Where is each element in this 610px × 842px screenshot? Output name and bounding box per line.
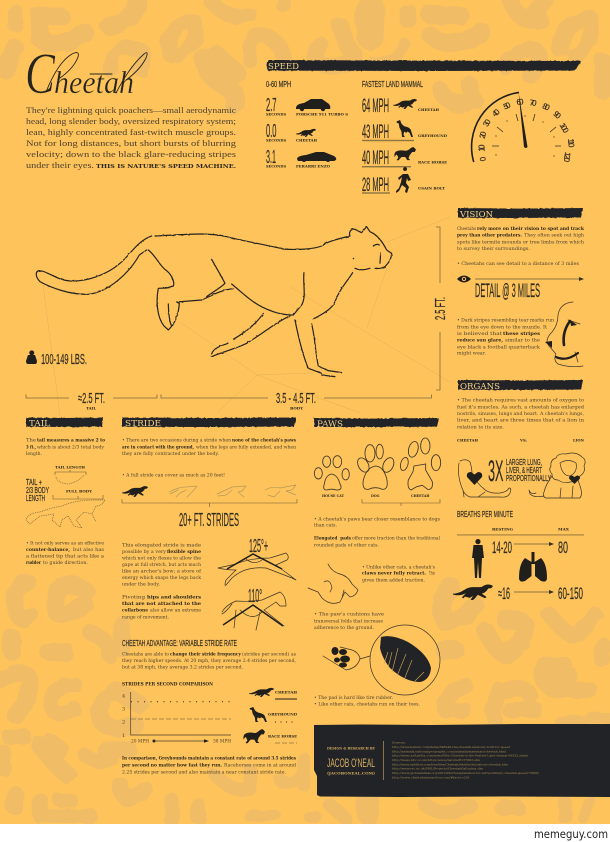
- stride text: • There are two occasions during a stride when: [122, 438, 232, 444]
- comparison labels: LION: [573, 438, 585, 442]
- organs heading bar: [458, 380, 583, 391]
- sources: http://www.globalanimal.org/2012/06/25/explanation-for-extraordinary-cheetah-speed/75860/: [392, 771, 540, 775]
- paws text: than cats.: [314, 523, 337, 529]
- vision text: rely more on their vision to spot and track: [477, 226, 584, 232]
- stride text: • A full stride can cover as much as 20 feet!: [122, 473, 225, 479]
- 0-60 mph column: FERARRI ENZO: [296, 164, 330, 168]
- tear stripes text: • Dark stripes resembling tear marks run: [457, 318, 555, 324]
- vision text: to survey their surroundings.: [457, 246, 530, 252]
- 0-60 mph column: SECONDS: [266, 138, 286, 142]
- paws text: rounded pads of other cats.: [314, 543, 379, 549]
- line chart: strides per second comparison: 20 MPH: [131, 739, 150, 745]
- stride text: [122, 438, 297, 479]
- speedometer: 110: [566, 138, 576, 148]
- panel: stride: [122, 418, 298, 775]
- stride text: are in contact with the ground,: [122, 444, 194, 450]
- panel: paws: [308, 418, 441, 708]
- flexible spine text: also allow an extreme: [150, 608, 201, 614]
- stride heading bar: STRIDE: [125, 419, 161, 428]
- comparison labels: [457, 438, 585, 442]
- weight label: [26, 350, 87, 368]
- cushion text: • The paw's cushions have: [314, 612, 384, 618]
- cushion text: [314, 612, 384, 631]
- sources: http://www.helium.com/items/598946-the-cheetah-anatomy-built-for-speed: [392, 745, 510, 749]
- sources: http://animals.nationalgeographic.com/animals/mammals/cheetah.html: [392, 749, 506, 753]
- 110 degree angle diagram: 110°: [248, 586, 262, 606]
- breaths per minute table: [453, 509, 584, 603]
- sources: Sources:: [392, 740, 406, 744]
- breaths per minute table: 14-20: [492, 539, 512, 557]
- panel: vision: [457, 208, 585, 367]
- fastest land mammal column: 40 MPH: [362, 148, 389, 169]
- 3x larger text: 3X: [488, 455, 504, 488]
- intro text: velocity; down to the black glare-reducing stripes: [26, 150, 236, 159]
- breaths per minute table: 80: [558, 539, 568, 557]
- claw text: [362, 564, 435, 584]
- 3x larger text: LARGER LUNG,: [506, 457, 542, 467]
- footer credits: [314, 724, 610, 797]
- dimension: body: BODY: [290, 406, 303, 410]
- sources: [392, 740, 540, 779]
- legend: race horse: [243, 729, 297, 743]
- speedometer: 80: [541, 101, 552, 113]
- tear stripes text: from the eye down to the muzzle. It: [457, 324, 547, 330]
- line chart: strides per second comparison: 3: [122, 706, 125, 712]
- 0-60 mph column: SECONDS: [266, 164, 286, 168]
- tail length diagram: 2/3 BODY: [26, 485, 49, 495]
- stride text: when the legs are fully extended, and when: [196, 444, 297, 450]
- fastest land mammal column: [362, 79, 447, 196]
- panel: stride: 20+ FT. STRIDES: [179, 510, 239, 530]
- speedometer: 70: [529, 98, 538, 108]
- paw print comparison: CHEETAH: [411, 494, 430, 498]
- comparison text: [122, 756, 297, 775]
- breaths per minute table: MAX: [558, 527, 569, 531]
- tail length diagram: [26, 465, 105, 528]
- dimension: tail: ≈2.5 FT.: [78, 391, 105, 407]
- vision heading bar: VISION: [459, 210, 493, 219]
- paws heading bar: [314, 418, 439, 428]
- tail text: [26, 438, 106, 457]
- dimension: body: [161, 391, 432, 410]
- speedometer: 50: [502, 100, 512, 111]
- speed heading bar: SPEED: [268, 62, 299, 71]
- tail text: which is about 2/3 total body: [37, 444, 104, 450]
- paw print comparison: HOUSE CAT: [322, 494, 344, 498]
- dimension: body: 3.5 - 4.5 FT.: [276, 391, 316, 407]
- designer credit: (JACOBONEAL.COM): [327, 771, 375, 775]
- flexible spine text: which not only flexes to allow the: [122, 555, 201, 561]
- fastest land mammal column: 64 MPH: [362, 96, 389, 117]
- line chart: strides per second comparison: 1: [122, 733, 125, 739]
- cushion text: transversal folds that increase: [314, 619, 383, 625]
- breaths per minute table: ≈16: [498, 585, 510, 603]
- cheetah advantage text: (strides per second) as: [242, 650, 296, 657]
- tail rudder text: [26, 540, 104, 566]
- vision text: They often seek out high: [524, 233, 585, 239]
- cushion text: adherence to the ground.: [314, 625, 374, 631]
- faint anatomical guide lines: [43, 217, 450, 415]
- designer credit: JACOB O'NEAL: [327, 756, 375, 770]
- claw text: gives them added traction.: [362, 578, 425, 584]
- comparison labels: VS.: [519, 438, 527, 442]
- panel: organs: [453, 380, 585, 603]
- sources: http://www.upbflyer.com/headlies/Cheetah/hdsites/hdo/about-cheetah.htm: [392, 762, 508, 766]
- organs text: fuel it's muscles. As such, a cheetah has enlarged: [457, 404, 585, 410]
- sources: http://news.bbc.co.uk/2/hi/science/nature/8137062.stm: [392, 758, 480, 762]
- claw text: • Unlike other cats, a cheetah's: [362, 564, 435, 570]
- tear stripes text: is believed that: [457, 331, 502, 337]
- comparison text: In comparison, Greyhounds maintain a constant rate of around 3.5 strides: [122, 756, 296, 762]
- icon: human: [472, 539, 484, 578]
- stride text: none of the cheetah's paws: [232, 438, 296, 444]
- cheetah line drawing: [36, 227, 392, 377]
- tail length diagram: LENGTH: [26, 493, 45, 503]
- dimension: height: 2.5 FT.: [433, 297, 449, 320]
- 0-60 mph column: 0-60 MPH: [266, 79, 291, 89]
- main cheetah outline with measurements: [26, 227, 449, 410]
- tail heading bar: TAIL: [29, 419, 51, 428]
- legend: greyhound: [250, 707, 297, 722]
- sources: http://www.rvc.ac.uk/SML/Projects/CheetahGalloping.cfm: [392, 767, 483, 771]
- speedometer: [472, 92, 576, 163]
- tail length diagram: FULL BODY: [66, 489, 92, 493]
- 0-60 mph column: 3.1: [266, 147, 276, 167]
- tail rudder text: counter-balance,: [26, 547, 70, 553]
- icon: lungs: [519, 552, 547, 582]
- fastest land mammal column: GREYHOUND: [418, 134, 447, 138]
- dimension: tail: [26, 391, 157, 410]
- line chart: strides per second comparison: 4: [122, 694, 125, 700]
- tail heading bar: [26, 418, 103, 428]
- intro text: Not for long distances, but short bursts of blurring: [26, 139, 236, 148]
- tear stripes text: reduce sun glare,: [457, 338, 503, 344]
- vision text: Cheetahs: [457, 226, 476, 232]
- intro text: They're lightning quick poachers—small aerodynamic: [26, 106, 236, 115]
- cheetah face sketch: [545, 302, 583, 367]
- breaths per minute table: 60-150: [558, 585, 583, 603]
- weight label: 100-149 LBS.: [41, 352, 87, 368]
- organs text: [457, 398, 585, 430]
- 0-60 mph column: SECONDS: [266, 112, 286, 116]
- comparison text: Racehorses come in at around: [224, 763, 297, 769]
- speedometer: 30: [481, 117, 493, 128]
- paws text: Elongated pads: [314, 536, 351, 542]
- tail text: tail measures a massive 2 to: [37, 438, 106, 444]
- tail text: length.: [26, 451, 42, 457]
- organs text: nostrils, sinuses, lungs and heart. A cheetah's lungs,: [457, 411, 584, 417]
- comparison text: per second no matter how fast they run.: [122, 763, 222, 769]
- cheetah advantage text: [122, 650, 296, 670]
- tear stripes text: eye black a football quarterback: [457, 344, 541, 350]
- flexible spine text: Pivoting: [122, 595, 146, 601]
- tail text: The: [26, 438, 36, 444]
- 0-60 mph column: PORSCHE 911 TURBO S: [296, 112, 348, 116]
- 3x larger text: PROPORTIONALLY: [506, 473, 551, 483]
- vision text: spots like termite mounds or tree limbs from which: [457, 239, 585, 245]
- legend: race horse: RACE HORSE: [268, 734, 297, 738]
- 125 degree angle diagram: 125°+: [249, 536, 268, 556]
- vision text: [457, 226, 585, 267]
- 3x larger text: LIVER, & HEART: [506, 465, 542, 475]
- tail rudder text: a flattened tip that acts like a: [26, 553, 104, 559]
- organs text: relation to its size.: [457, 424, 504, 430]
- intro text: THIS IS NATURE'S SPEED MACHINE.: [96, 164, 236, 170]
- paw print comparison: DOG: [371, 494, 380, 498]
- tail rudder text: rudder: [26, 560, 41, 566]
- paws text: [314, 516, 440, 549]
- speedometer: 10: [478, 144, 486, 152]
- line chart: strides per second comparison: [122, 682, 298, 745]
- comparison labels: CHEETAH: [457, 438, 479, 442]
- cheetah advantage text: they reach higher speeds. At 20 mph, they average 2.4 strides per second,: [122, 658, 296, 664]
- speedometer: 120: [562, 151, 572, 163]
- flexible spine text: gape at full stretch, but acts much: [122, 562, 202, 568]
- tear stripes text: might wear.: [457, 351, 486, 357]
- panel: tail: [26, 418, 106, 566]
- organs text: liver, and heart are three times that of a lion in: [457, 418, 585, 424]
- vision heading bar: [458, 208, 583, 219]
- flexible spine text: flexible spine: [167, 549, 201, 555]
- 0-60 mph column: [266, 79, 348, 168]
- tail text: 3 ft.,: [26, 444, 36, 450]
- fastest land mammal column: 43 MPH: [362, 122, 389, 143]
- designer credit: DESIGN & RESEARCH BY: [327, 746, 375, 750]
- fastest land mammal column: FASTEST LAND MAMMAL: [362, 79, 423, 89]
- flexible spine text: possible by a very: [122, 549, 166, 555]
- tail rudder text: but also has: [73, 547, 104, 553]
- tail rudder text: to guide direction.: [43, 560, 88, 566]
- dimension: height: [433, 227, 449, 390]
- legend: greyhound: GREYHOUND: [268, 712, 297, 716]
- 3x larger text: [488, 455, 551, 488]
- sitting cheetah with heart: [458, 460, 511, 497]
- tear stripes text: [457, 318, 555, 357]
- watermark strip: [0, 824, 610, 842]
- intro text: lean, highly concentrated fast-twitch muscle groups.: [26, 128, 236, 137]
- flexible spine text: like an archer's bow; a store of: [122, 569, 202, 575]
- vision text: prey than other predators.: [457, 233, 522, 239]
- fastest land mammal column: RACE HORSE: [418, 160, 447, 164]
- sources: http://www.cheetahinteraction.com/#facts-c23f: [392, 775, 470, 779]
- breaths per minute table: BREATHS PER MINUTE: [457, 509, 513, 519]
- designer credit: [327, 741, 384, 780]
- tail length diagram: TAIL +: [26, 477, 42, 487]
- intro text: [26, 106, 236, 170]
- flexible spine text: that are not attached to the: [122, 601, 201, 607]
- speedometer: 100: [558, 121, 571, 135]
- pad text: [314, 695, 420, 708]
- tear stripes text: similar to the: [505, 338, 540, 344]
- dimension: tail: TAIL: [86, 406, 96, 410]
- paw print comparison: [314, 438, 441, 506]
- cheetah advantage text: Cheetahs are able to: [122, 651, 169, 657]
- paw pad detail: [323, 625, 440, 695]
- cheetah advantage text: change their stride frequency: [170, 651, 242, 657]
- paws text: offer more traction than the traditional: [352, 536, 440, 542]
- fastest land mammal column: USAIN BOLT: [418, 186, 445, 190]
- claw text: claws never fully retract.: [362, 571, 426, 577]
- speedometer: 20: [478, 130, 488, 140]
- claw sketch: [308, 564, 358, 603]
- cheetah advantage heading: CHEETAH ADVANTAGE: VARIABLE STRIDE RATE: [122, 638, 237, 648]
- legend: cheetah: CHEETAH: [275, 690, 298, 694]
- fastest land mammal column: CHEETAH: [418, 108, 440, 112]
- flexible spine text: [122, 542, 202, 620]
- line chart: strides per second comparison: 38 MPH: [213, 739, 232, 745]
- stride text: they are fully contracted under the body.: [122, 451, 219, 457]
- organs heading bar: ORGANS: [460, 382, 500, 391]
- speedometer: 60: [516, 97, 524, 107]
- intro text: head, long slender body, oversized respiratory system;: [26, 117, 236, 126]
- stride sequence of cheetahs: [122, 485, 297, 507]
- panel: speed: [266, 60, 581, 196]
- flexible spine text: under the body.: [122, 582, 160, 588]
- flexible spine text: collarbone: [122, 608, 148, 614]
- legend: cheetah: [249, 688, 298, 700]
- flexible spine text: hips and shoulders: [147, 595, 201, 601]
- speedometer: 0: [478, 155, 488, 162]
- fastest land mammal column: 28 MPH: [362, 175, 389, 196]
- tail length diagram: TAIL LENGTH: [55, 465, 86, 469]
- title: [25, 41, 147, 106]
- comparison text: 2.25 strides per second and also maintain a near constant stride rate.: [122, 769, 286, 775]
- paws text: • A cheetah's paws bear closer resemblance to dogs: [314, 516, 440, 522]
- tear stripes text: these stripes: [503, 331, 540, 337]
- line chart: strides per second comparison: 2: [122, 720, 125, 726]
- flexible spine text: energy which snaps the legs back: [122, 575, 202, 581]
- icon: running cheetah: [453, 585, 493, 600]
- cheetah advantage text: but at 38 mph, they average 3.2 strides per second.: [122, 664, 243, 670]
- 125 degree angle diagram: [218, 536, 296, 585]
- tail rudder text: • It not only serves as an effective: [26, 540, 104, 546]
- sitting lion with heart: [529, 453, 585, 498]
- 0-60 mph column: 0.0: [266, 121, 276, 141]
- paws heading bar: PAWS: [317, 419, 343, 428]
- title: heetah: [54, 64, 134, 100]
- speedometer: 90: [551, 109, 563, 121]
- stride heading bar: [122, 418, 296, 428]
- 0-60 mph column: 2.7: [266, 95, 276, 115]
- 0-60 mph column: CHEETAH: [296, 138, 318, 142]
- intro text: under their eyes.: [26, 161, 94, 170]
- icon: eye with arrow: [457, 276, 584, 282]
- claw text: This: [429, 571, 435, 577]
- sources: http://news.softpedia.com/news/Why-Cheetah-is-the-Fastest-Land-Animal-69322.shtml: [392, 754, 528, 758]
- title: C: [25, 41, 56, 106]
- organs text: • The cheetah requires vast amounts of oxygen to: [457, 398, 584, 404]
- speed heading bar: [266, 60, 581, 71]
- pad text: • Like other cats, cheetahs run on their toes.: [314, 702, 420, 708]
- flexible spine text: This elongated stride is made: [122, 542, 201, 548]
- breaths per minute table: RESTING: [492, 527, 513, 531]
- vision text: • Cheetahs can see detail to a distance of 3 miles: [457, 261, 579, 267]
- line chart: strides per second comparison: STRIDES PER SECOND COMPARISON: [122, 682, 213, 688]
- pad text: • The pad is hard like tire rubber.: [314, 695, 393, 701]
- 110 degree angle diagram: [222, 586, 286, 630]
- flexible spine text: range of movement.: [122, 614, 169, 620]
- speedometer: 40: [490, 107, 502, 119]
